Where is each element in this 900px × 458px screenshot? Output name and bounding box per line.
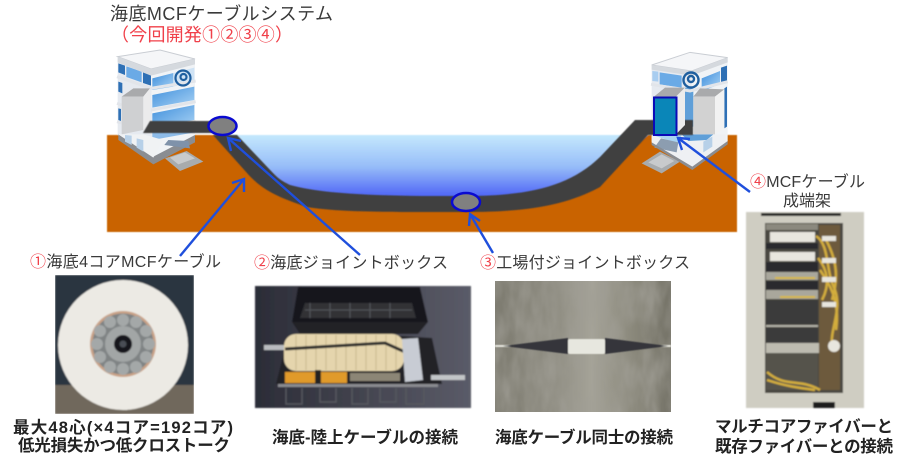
label 2: ②海底ジョイントボックス — [254, 254, 448, 272]
title: 海底MCFケーブルシステム — [110, 3, 333, 24]
caption: rack: 既存ファイバーとの接続 — [715, 436, 894, 456]
arrow: factory joint box label — [469, 214, 493, 253]
label 1: ①海底4コアMCFケーブル — [30, 252, 221, 271]
icon: right building logo — [684, 72, 698, 88]
caption: cable — [13, 418, 233, 455]
caption: rack: マルチコアファイバーと — [715, 417, 893, 436]
label 4 second line: 成端架 — [783, 192, 831, 210]
seabed cross-section — [107, 135, 737, 232]
highlight: factory joint box — [452, 193, 480, 211]
photo: cable cross-section — [55, 275, 194, 414]
arrow: cable label to cable — [180, 179, 244, 256]
water — [225, 135, 648, 204]
caption: factory joint box: 海底ケーブル同士の接続 — [495, 427, 674, 447]
ground — [107, 135, 737, 232]
label 4: ④MCFケーブル — [750, 172, 865, 191]
arrow: rack label — [678, 138, 750, 192]
photo: joint box — [255, 286, 471, 408]
caption: joint box: 海底-陸上ケーブルの接続 — [272, 427, 458, 447]
submarine MCF cable — [143, 120, 693, 212]
arrow: joint box label — [228, 138, 360, 255]
caption: cable: 低光損失かつ低クロストーク — [18, 436, 230, 455]
icon: left building logo — [176, 70, 190, 86]
left building — [117, 50, 203, 171]
right building — [642, 52, 728, 173]
photo: termination rack — [746, 212, 864, 408]
right building rack blocks — [654, 88, 724, 134]
highlight: submarine joint box — [208, 117, 236, 135]
caption: rack — [715, 417, 894, 456]
highlight: MCF cable termination rack — [654, 98, 676, 135]
caption: cable: 最大48心(×4コア=192コア) — [13, 418, 233, 437]
photo: factory joint box — [495, 281, 671, 412]
label 3: ③工場付ジョイントボックス — [480, 254, 690, 272]
subtitle: developed items: （今回開発①②③④） — [111, 25, 293, 45]
